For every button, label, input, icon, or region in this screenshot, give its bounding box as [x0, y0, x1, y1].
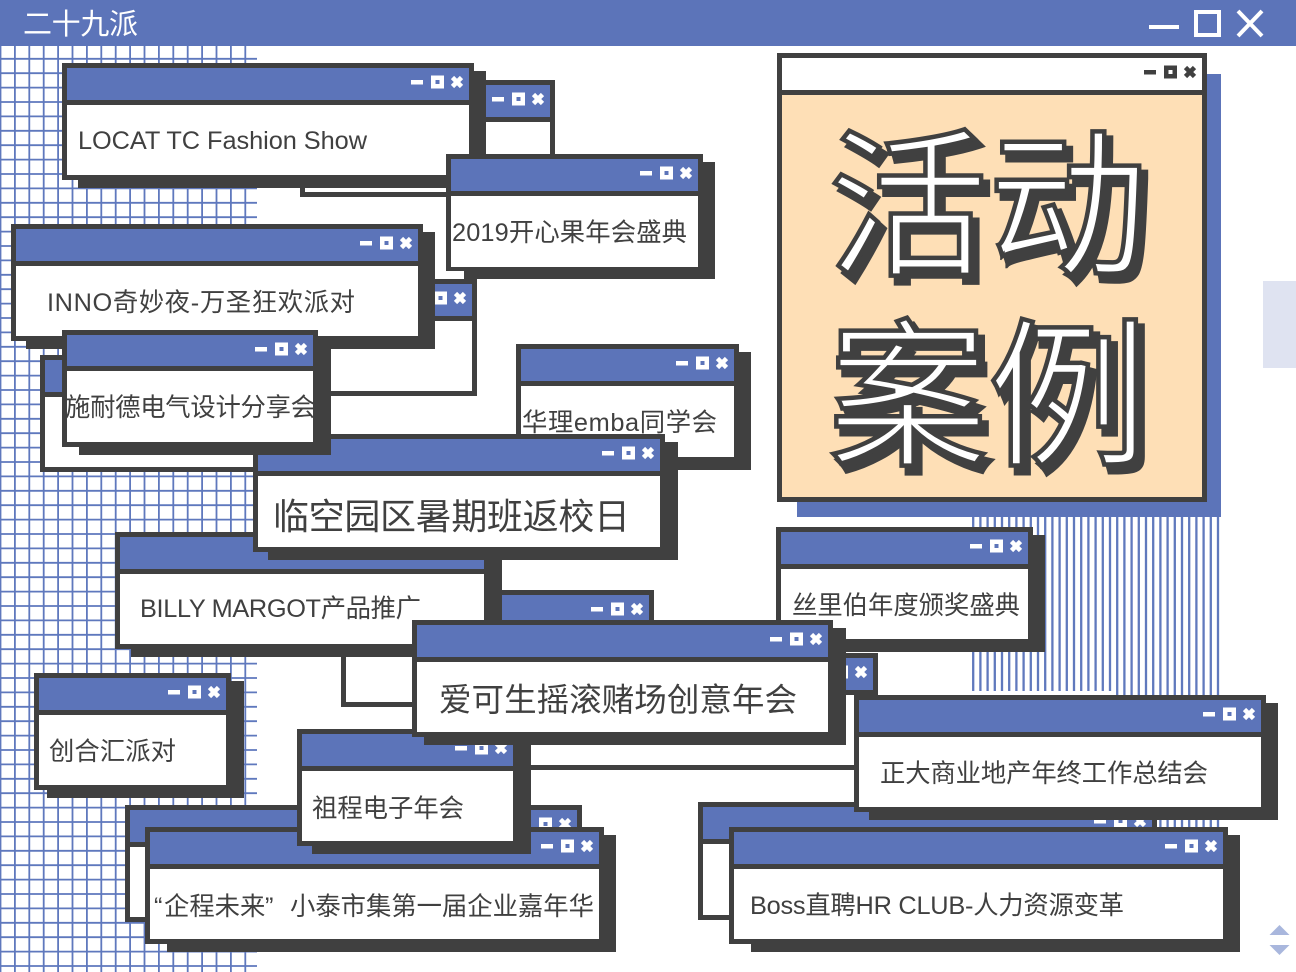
panel: back window behind Boss [698, 802, 1157, 920]
heading shadow: 案例 [834, 315, 1154, 494]
heading shadow: 活动 [834, 125, 1154, 304]
panel: INNO奇妙夜-万圣狂欢派对 [11, 224, 435, 349]
panel: 祖程电子年会 [297, 729, 531, 854]
panel: 施耐德电气设计分享会 [62, 330, 331, 455]
panel: back window behind 爱可 [500, 653, 878, 770]
panel: 2019开心果年会盛典 [446, 154, 715, 279]
icon: maximize [1196, 12, 1219, 35]
icon: page arrows [1270, 925, 1290, 955]
panel: feature window 活动案例 [777, 53, 1221, 517]
icon: close [1238, 11, 1262, 36]
panel: LOCAT TC Fashion Show [62, 63, 486, 188]
label: 祖程电子年会 [312, 795, 464, 823]
label: 创合汇派对 [49, 738, 176, 766]
panel: 爱可生摇滚赌场创意年会 [412, 620, 846, 745]
panel: BILLY MARGOT产品推广 [115, 532, 502, 657]
label: 华理emba同学会 [522, 409, 717, 437]
panel: Boss直聘HR CLUB-人力资源变革 [729, 827, 1240, 952]
heading: 案例 [828, 308, 1148, 487]
label: 爱可生摇滚赌场创意年会 [439, 682, 797, 718]
heading [828, 118, 1148, 487]
label: 丝里伯年度颁奖盛典 [792, 592, 1020, 620]
panel: 临空园区暑期班返校日 [253, 434, 678, 560]
heading shadow [834, 125, 1154, 494]
label: 临空园区暑期班返校日 [273, 496, 630, 537]
panel: 丝里伯年度颁奖盛典 [776, 527, 1045, 652]
panel: 华理emba同学会 [516, 344, 751, 470]
panel: 企程未来 小泰市集第一届企业嘉年华 [145, 827, 616, 952]
scroll tab [1263, 281, 1296, 368]
label: 企程未来 [164, 893, 265, 921]
panel: back window behind BILLY [341, 590, 654, 707]
app name: 二十九派 [23, 8, 138, 41]
background vertical stripes [973, 516, 1218, 830]
label: INNO奇妙夜-万圣狂欢派对 [47, 289, 355, 317]
panel: 正大商业地产年终工作总结会 [854, 695, 1278, 820]
label: 正大商业地产年终工作总结会 [880, 760, 1208, 788]
panel: back window behind LOCAT [300, 80, 555, 197]
background grid pattern [0, 46, 257, 972]
label: BILLY MARGOT产品推广 [140, 595, 421, 623]
heading: 活动 [828, 118, 1148, 297]
label: 施耐德电气设计分享会 [65, 394, 316, 422]
panel: 创合汇派对 [34, 673, 244, 798]
label: 2019开心果年会盛典 [452, 219, 687, 247]
icon: minimize [1149, 25, 1179, 29]
label: 小泰市集第一届企业嘉年华 [290, 893, 594, 921]
panel: back window behind 施耐德 [40, 355, 310, 472]
panel: back window behind INNO [220, 279, 477, 396]
label: Boss直聘HR CLUB-人力资源变革 [750, 892, 1124, 920]
label: LOCAT TC Fashion Show [78, 127, 368, 155]
panel: back window behind 企程未来 [125, 805, 582, 922]
label: ” [265, 893, 273, 921]
top app bar [0, 0, 1296, 46]
label: “ [154, 893, 162, 921]
window controls [1144, 66, 1194, 78]
